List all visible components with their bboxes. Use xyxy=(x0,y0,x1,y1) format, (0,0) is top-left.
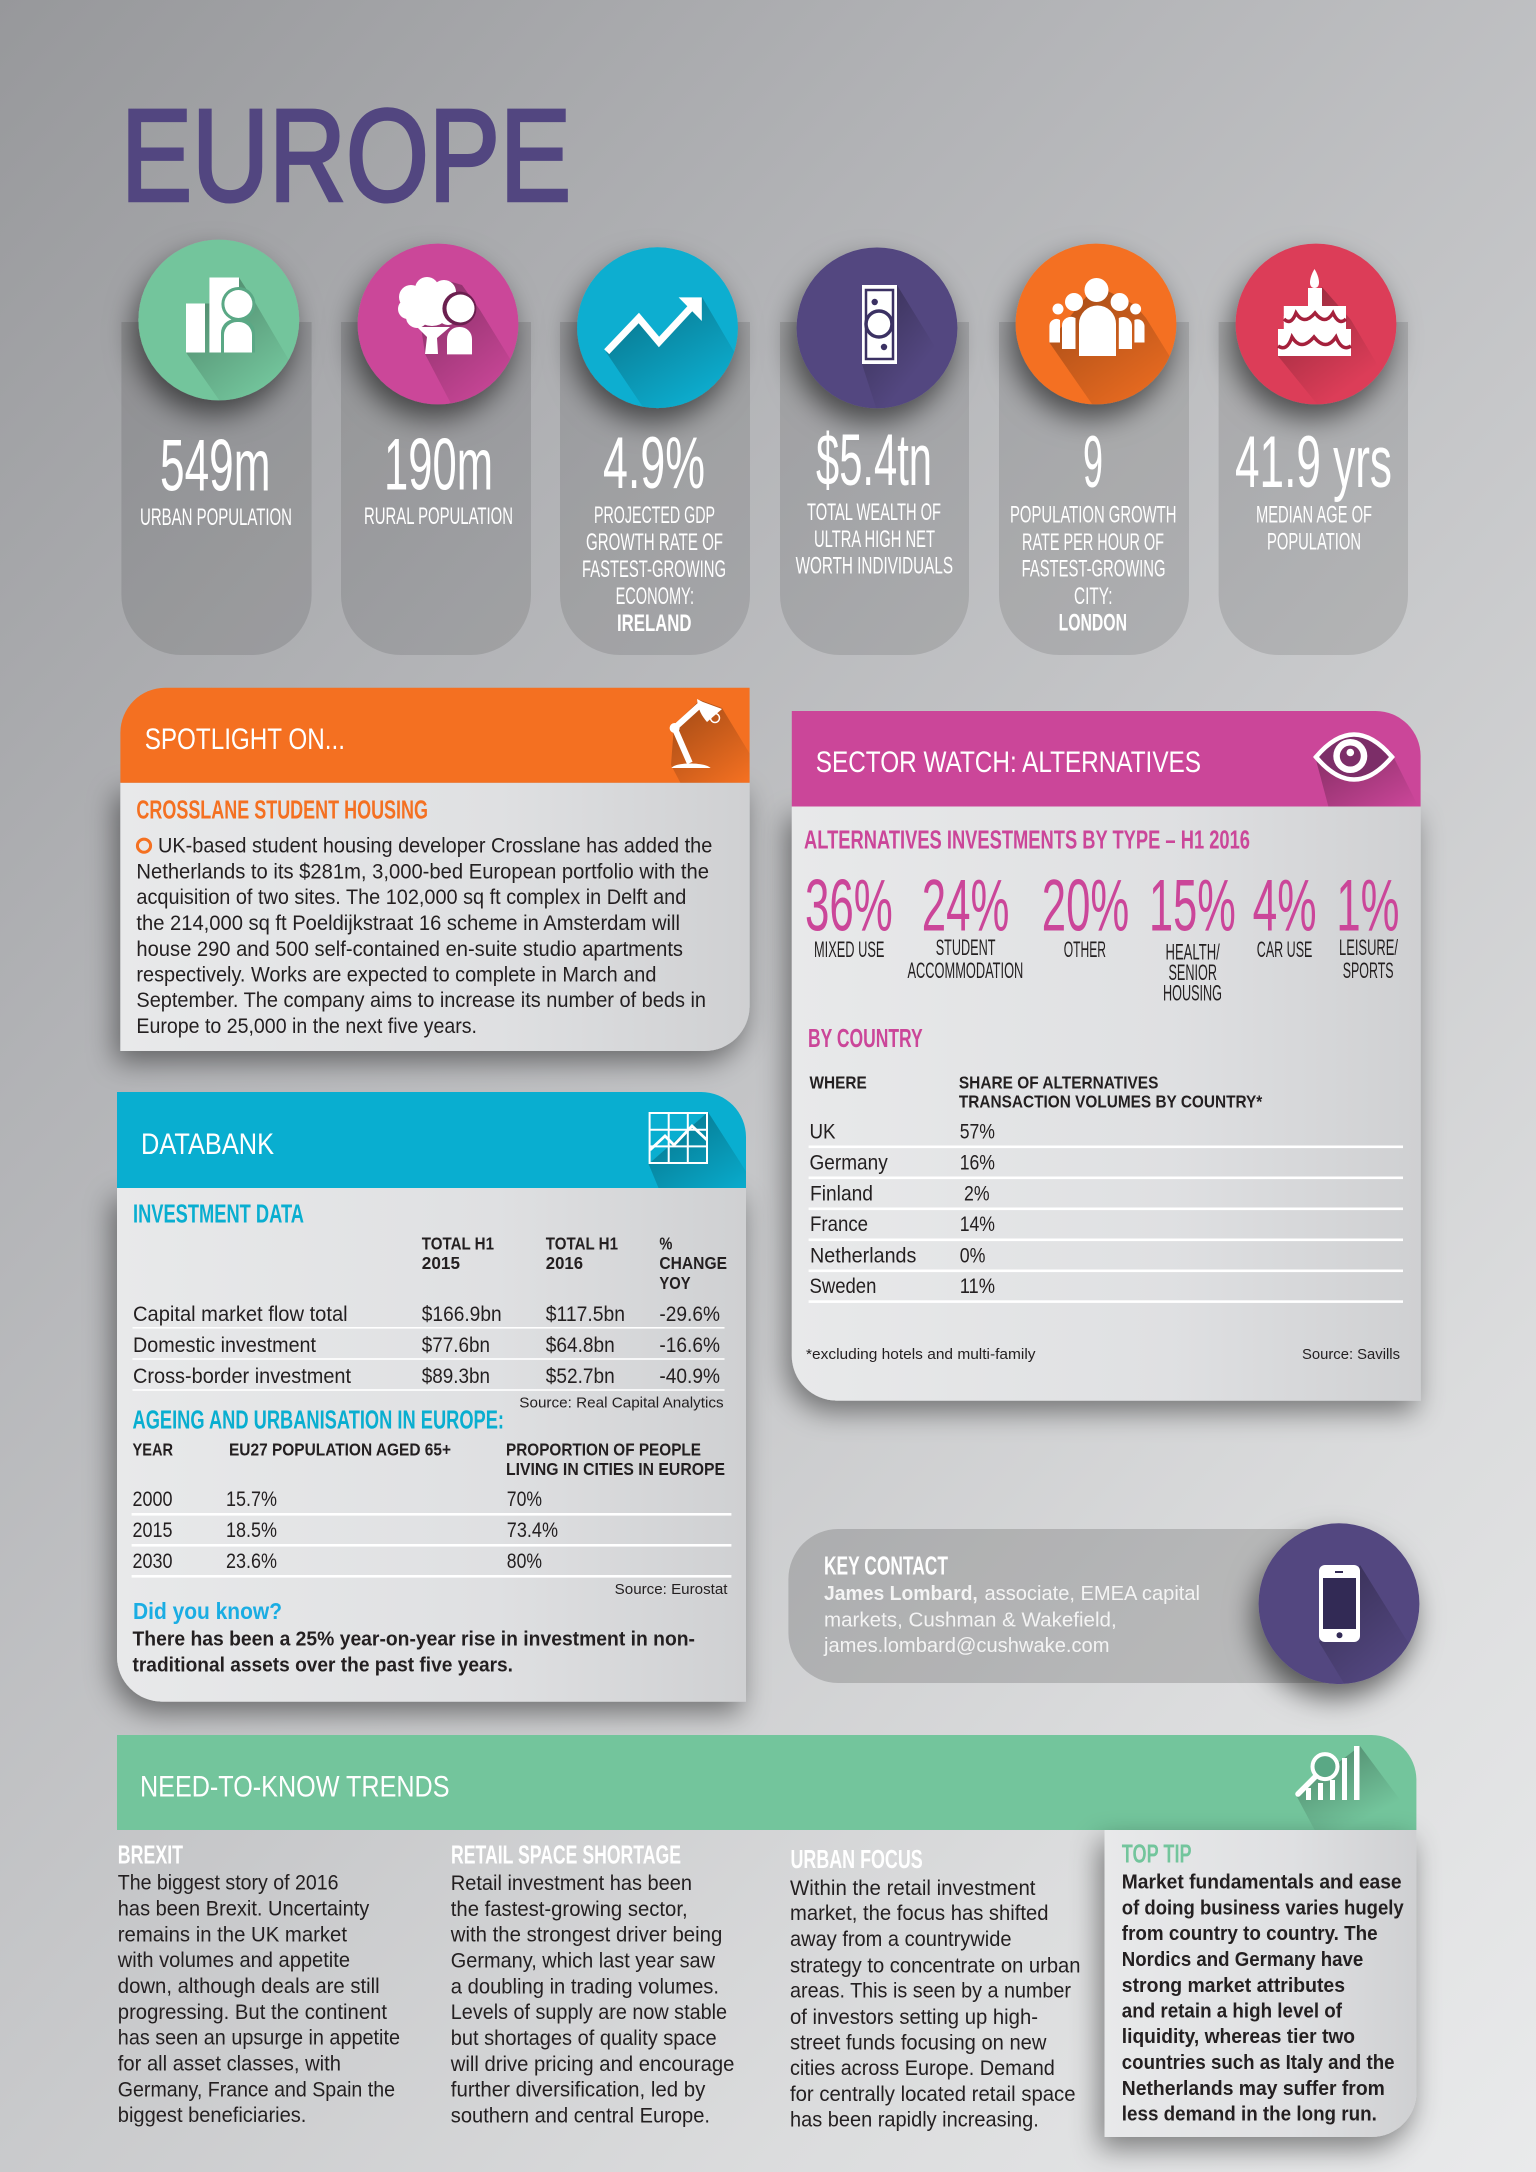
column: retail space shortage: the fastest-growing sector, xyxy=(451,1898,688,1921)
panel: top tip: TOP TIP xyxy=(1122,1839,1192,1869)
spotlight body text: Europe to 25,000 in the next five years. xyxy=(136,1015,477,1038)
ageing and urbanisation table: 2000 xyxy=(132,1488,172,1511)
ageing and urbanisation table: EU27 POPULATION AGED 65+ xyxy=(229,1440,451,1460)
key contact text: james.lombard@cushwake.com xyxy=(823,1634,1110,1657)
ageing and urbanisation table: 73.4% xyxy=(507,1519,558,1542)
key contact text: markets, Cushman & Wakefield, xyxy=(824,1608,1117,1631)
investment data table: 2016 xyxy=(546,1253,583,1273)
investment data table: % xyxy=(659,1233,673,1253)
trends header xyxy=(117,1735,1416,1830)
investment data table: Cross-border investment xyxy=(133,1365,351,1388)
did you know callout: Did you know? xyxy=(133,1598,282,1624)
ageing and urbanisation table: 80% xyxy=(507,1550,542,1573)
label: POPULATION xyxy=(1267,528,1361,556)
by country table: Sweden xyxy=(810,1275,876,1298)
icon: banknote xyxy=(797,248,957,420)
panel: top tip: of doing business varies hugely xyxy=(1122,1896,1404,1920)
spotlight body text: Netherlands to its $281m, 3,000-bed European portfolio with the xyxy=(136,861,709,884)
panel: top tip: Netherlands may suffer from xyxy=(1122,2077,1385,2100)
stat card: ultra high net worth wealth xyxy=(780,248,969,655)
label: FASTEST-GROWING xyxy=(1022,556,1166,583)
student accommodation: STUDENT xyxy=(936,935,996,960)
spotlight body text: September. The company aims to increase its number of beds in xyxy=(136,989,706,1012)
by country table: 0% xyxy=(960,1244,985,1267)
stat card: rural population xyxy=(336,240,531,655)
column: retail space shortage: a doubling in trading volumes. xyxy=(451,1976,719,1999)
value: 4.9% xyxy=(603,423,705,504)
by country table: 2% xyxy=(964,1182,990,1206)
column: urban focus: areas. This is seen by a number xyxy=(790,1980,1071,2003)
by country table: 11% xyxy=(960,1275,995,1298)
icon: tree and person xyxy=(358,244,560,440)
investment data table: TOTAL H1 xyxy=(546,1233,618,1253)
investment data table: $64.8bn xyxy=(546,1334,615,1357)
label: ECONOMY: xyxy=(616,583,694,610)
investment data table: -29.6% xyxy=(659,1303,720,1326)
stat card: urban population xyxy=(121,240,330,655)
column: retail space shortage: but shortages of quality space xyxy=(451,2027,717,2050)
column: retail space shortage: RETAIL SPACE SHORTAGE xyxy=(451,1839,681,1869)
other: 20% xyxy=(1042,866,1129,946)
column: retail space shortage: will drive pricing and encourage xyxy=(450,2053,734,2076)
car use: 4% xyxy=(1253,866,1317,946)
investment data table: Source: Real Capital Analytics xyxy=(519,1394,724,1411)
column: brexit: The biggest story of 2016 xyxy=(118,1872,338,1895)
key contact text xyxy=(823,1551,1200,1657)
by country table: Netherlands xyxy=(810,1244,916,1267)
column: brexit: down, although deals are still xyxy=(118,1975,380,1998)
ageing and urbanisation table: YEAR xyxy=(132,1440,173,1460)
column: brexit: biggest beneficiaries. xyxy=(118,2104,306,2127)
by country table: UK xyxy=(810,1120,836,1144)
ageing and urbanisation table: PROPORTION OF PEOPLE xyxy=(506,1440,701,1460)
spotlight body text: UK-based student housing developer Crosslane has added the xyxy=(158,835,712,858)
investment data table: $117.5bn xyxy=(546,1303,625,1326)
value: 190m xyxy=(384,424,493,506)
investments by type: ALTERNATIVES INVESTMENTS BY TYPE – H1 2016 xyxy=(804,824,1250,854)
label: RURAL POPULATION xyxy=(364,503,513,530)
label: WORTH INDIVIDUALS xyxy=(796,553,953,580)
ageing and urbanisation table: 15.7% xyxy=(226,1488,277,1511)
investment data table: INVESTMENT DATA xyxy=(133,1198,304,1228)
column: retail space shortage: further diversification, led by xyxy=(451,2079,706,2102)
label: GROWTH RATE OF xyxy=(586,529,723,556)
student accommodation: 24% xyxy=(922,866,1009,946)
spotlight body text: house 290 and 500 self-contained en-suite studio apartments xyxy=(136,938,683,961)
value: 41.9 yrs xyxy=(1235,422,1392,503)
panel: top tip xyxy=(1104,1830,1416,2137)
mixed use: 36% xyxy=(805,866,893,946)
label: FASTEST-GROWING xyxy=(582,556,726,583)
investment data table xyxy=(132,1198,727,1411)
health and senior housing: 15% xyxy=(1149,866,1236,946)
databank header: DATABANK xyxy=(141,1128,274,1161)
panel: sector watch xyxy=(792,711,1440,1401)
by country table: France xyxy=(810,1213,868,1236)
icon: line chart grid xyxy=(648,1112,746,1188)
column: brexit xyxy=(117,1839,400,2127)
panel: top tip: countries such as Italy and the xyxy=(1122,2051,1394,2074)
label: ULTRA HIGH NET xyxy=(814,526,935,553)
ageing and urbanisation table: LIVING IN CITIES IN EUROPE xyxy=(506,1459,725,1479)
column: retail space shortage: Levels of supply are now stable xyxy=(451,2001,727,2024)
column: urban focus: URBAN FOCUS xyxy=(790,1844,923,1874)
stat card: median age xyxy=(1219,244,1410,655)
label: PROJECTED GDP xyxy=(594,502,715,529)
leisure and sports: SPORTS xyxy=(1343,958,1394,983)
column: retail space shortage: Retail investment has been xyxy=(451,1872,692,1895)
label: IRELAND xyxy=(617,610,692,637)
student accommodation: ACCOMMODATION xyxy=(908,958,1023,983)
column: urban focus: of investors setting up high- xyxy=(790,2006,1038,2029)
key contact text: associate, EMEA capital xyxy=(984,1582,1200,1605)
icon: magnifier and bars xyxy=(1296,1746,1430,1840)
ageing and urbanisation table: Source: Eurostat xyxy=(615,1581,728,1598)
investment data table: YOY xyxy=(659,1273,691,1293)
stat card: population growth: 9 xyxy=(1083,422,1103,503)
ageing and urbanisation table xyxy=(132,1405,731,1598)
health and senior housing: SENIOR xyxy=(1168,960,1217,985)
spotlight header: SPOTLIGHT ON... xyxy=(145,723,345,756)
icon: birthday cake xyxy=(1236,244,1410,420)
by country table: 57% xyxy=(960,1120,995,1144)
sector watch header: SECTOR WATCH: ALTERNATIVES xyxy=(816,746,1201,779)
footnote: *excluding hotels and multi-family xyxy=(806,1346,1036,1363)
health and senior housing: HOUSING xyxy=(1163,981,1222,1006)
ageing and urbanisation table: 2030 xyxy=(132,1550,172,1573)
leisure and sports: 1% xyxy=(1336,866,1400,946)
icon: growth arrow xyxy=(577,247,780,440)
icon: buildings and person xyxy=(138,240,330,430)
ageing and urbanisation table: AGEING AND URBANISATION IN EUROPE: xyxy=(132,1405,504,1435)
panel: top tip: liquidity, whereas tier two xyxy=(1122,2025,1355,2048)
spotlight body text xyxy=(136,835,712,1038)
by country table xyxy=(808,1023,1403,1303)
panel: top tip: strong market attributes xyxy=(1122,1974,1345,1997)
panel: top tip: Market fundamentals and ease xyxy=(1122,1870,1402,1893)
mixed use: MIXED USE xyxy=(814,937,884,962)
spotlight header xyxy=(120,688,750,783)
trends header: NEED-TO-KNOW TRENDS xyxy=(140,1771,450,1804)
by country table: Finland xyxy=(810,1182,873,1206)
panel: top tip: Nordics and Germany have xyxy=(1122,1948,1363,1971)
label: URBAN POPULATION xyxy=(140,504,292,531)
car use: CAR USE xyxy=(1257,937,1312,962)
panel: top tip: and retain a high level of xyxy=(1122,1999,1342,2022)
leisure and sports: LEISURE/ xyxy=(1339,935,1399,960)
investment data table: $77.6bn xyxy=(422,1334,490,1357)
did you know callout xyxy=(132,1598,695,1676)
column: retail space shortage: southern and central Europe. xyxy=(451,2105,710,2128)
investments by type xyxy=(804,824,1400,1006)
column: retail space shortage: Germany, which last year saw xyxy=(451,1950,716,1973)
label xyxy=(796,499,953,580)
by country table: WHERE xyxy=(810,1072,867,1092)
label: LONDON xyxy=(1059,610,1127,637)
panel: top tip: from country to country. The xyxy=(1122,1922,1378,1945)
icon: group of people xyxy=(992,240,1190,436)
panel: spotlight xyxy=(120,688,790,1051)
ageing and urbanisation table: 18.5% xyxy=(226,1519,277,1542)
mixed use xyxy=(805,866,893,962)
column: urban focus: away from a countrywide xyxy=(790,1928,1012,1951)
by country table: BY COUNTRY xyxy=(808,1023,923,1053)
icon: eye xyxy=(1313,732,1412,806)
value: 549m xyxy=(160,426,270,507)
column: retail space shortage: with the strongest driver being xyxy=(450,1924,722,1947)
investment data table: $52.7bn xyxy=(546,1365,615,1388)
investment data table: $166.9bn xyxy=(422,1303,502,1326)
by country table: TRANSACTION VOLUMES BY COUNTRY* xyxy=(959,1092,1262,1112)
ageing and urbanisation table: 2015 xyxy=(132,1519,172,1542)
spotlight body text: the 214,000 sq ft Poeldijkstraat 16 scheme in Amsterdam will xyxy=(136,912,680,935)
column: brexit: Germany, France and Spain the xyxy=(118,2078,395,2101)
investment data table: -40.9% xyxy=(659,1365,720,1388)
icon: desk lamp xyxy=(670,699,750,783)
column: brexit: has seen an upsurge in appetite xyxy=(118,2027,400,2050)
key contact text: KEY CONTACT xyxy=(824,1551,948,1581)
spotlight body text: respectively. Works are expected to complete in March and xyxy=(136,964,656,987)
spotlight body text: acquisition of two sites. The 102,000 sq ft complex in Delft and xyxy=(136,886,686,909)
column: urban focus: for centrally located retail space xyxy=(790,2083,1076,2106)
panel: key contact xyxy=(788,1523,1450,1710)
investment data table: $89.3bn xyxy=(422,1365,490,1388)
label xyxy=(1256,502,1372,556)
column: brexit: remains in the UK market xyxy=(118,1923,347,1946)
column: urban focus: Within the retail investment xyxy=(790,1877,1036,1900)
panel: databank xyxy=(117,1092,790,1702)
column: brexit: BREXIT xyxy=(118,1839,183,1869)
label: TOTAL WEALTH OF xyxy=(807,499,941,526)
investment data table: -16.6% xyxy=(659,1334,720,1357)
column: brexit: progressing. But the continent xyxy=(118,2001,387,2024)
ageing and urbanisation table: 70% xyxy=(507,1488,542,1511)
value: $5.4tn xyxy=(816,420,932,501)
label xyxy=(582,502,726,637)
icon: smartphone xyxy=(1259,1523,1450,1710)
did you know callout: traditional assets over the past five years. xyxy=(132,1653,513,1676)
databank header xyxy=(117,1092,746,1188)
investment data table: CHANGE xyxy=(659,1253,727,1273)
leisure and sports xyxy=(1336,866,1400,983)
spotlight heading: CROSSLANE STUDENT HOUSING xyxy=(136,795,428,825)
title: EUROPE xyxy=(121,82,571,228)
investment data table: 2015 xyxy=(422,1253,460,1273)
column: retail space shortage xyxy=(450,1839,734,2128)
panel: need-to-know trends xyxy=(117,1735,1430,2137)
label: RATE PER HOUR OF xyxy=(1022,529,1164,556)
car use xyxy=(1253,866,1317,962)
column: urban focus xyxy=(790,1844,1080,2132)
column: brexit: for all asset classes, with xyxy=(118,2053,341,2076)
by country table: SHARE OF ALTERNATIVES xyxy=(959,1072,1158,1092)
column: brexit: with volumes and appetite xyxy=(117,1949,350,1972)
panel: top tip: less demand in the long run. xyxy=(1122,2103,1377,2126)
ageing and urbanisation table: 23.6% xyxy=(226,1550,277,1573)
investment data table: Capital market flow total xyxy=(133,1303,348,1326)
did you know callout: There has been a 25% year-on-year rise in investment in non- xyxy=(132,1627,695,1650)
investment data table: TOTAL H1 xyxy=(422,1233,494,1253)
label: POPULATION GROWTH xyxy=(1010,502,1176,529)
other xyxy=(1042,866,1129,962)
student accommodation xyxy=(908,866,1023,983)
by country table: 16% xyxy=(960,1152,995,1175)
investment data table: Domestic investment xyxy=(133,1334,316,1357)
by country table: Germany xyxy=(810,1152,888,1175)
column: urban focus: strategy to concentrate on urban xyxy=(790,1954,1080,1977)
source: Source: Savills xyxy=(1302,1346,1400,1363)
health and senior housing: HEALTH/ xyxy=(1166,939,1220,964)
sector watch header xyxy=(792,711,1421,806)
column: urban focus: has been rapidly increasing. xyxy=(790,2109,1039,2132)
key contact text: James Lombard, xyxy=(824,1582,978,1605)
column: urban focus: market, the focus has shifted xyxy=(790,1902,1048,1925)
label xyxy=(1010,502,1176,637)
label: CITY: xyxy=(1074,583,1112,610)
column: urban focus: street funds focusing on new xyxy=(790,2032,1047,2054)
column: brexit: has been Brexit. Uncertainty xyxy=(118,1898,370,1921)
health and senior housing xyxy=(1149,866,1236,1006)
column: urban focus: cities across Europe. Demand xyxy=(790,2057,1055,2080)
stat card: population growth xyxy=(992,240,1190,655)
label: MEDIAN AGE OF xyxy=(1256,502,1372,529)
by country table: 14% xyxy=(960,1213,995,1236)
stat card: GDP growth xyxy=(555,244,751,655)
other: OTHER xyxy=(1064,937,1106,962)
